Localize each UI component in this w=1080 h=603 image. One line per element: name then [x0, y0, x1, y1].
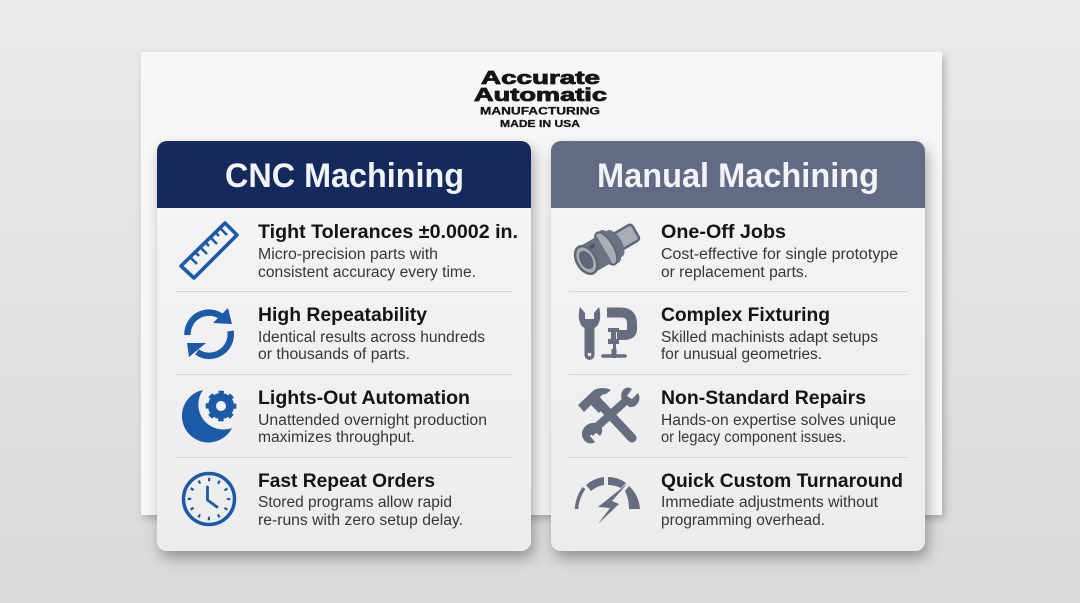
logo: MADE IN USA	[500, 119, 581, 130]
text: lights-out automation: Lights-Out Automation	[258, 387, 470, 409]
text: quick custom turnaround: Immediate adjustments without	[661, 494, 879, 511]
text: high repeatability: Identical results across hundreds	[258, 329, 485, 346]
backing sheet	[141, 52, 942, 515]
text: tight tolerances: consistent accuracy every time.	[258, 264, 476, 281]
text: complex fixturing: for unusual geometries.	[661, 346, 822, 363]
panel: Manual Machining	[551, 141, 925, 551]
text: tight tolerances: Tight Tolerances ±0.0002 in.	[258, 221, 518, 243]
text: lights-out automation: maximizes throughput.	[258, 429, 415, 446]
text: non-standard repairs: Non-Standard Repairs	[661, 387, 866, 409]
text: fast repeat orders	[258, 470, 463, 529]
icon: machined part	[569, 215, 645, 281]
icon: speed gauge	[576, 477, 640, 524]
icon: clock	[184, 474, 234, 524]
heading: Manual Machining: Manual Machining	[597, 157, 879, 195]
icon: moon and gear	[182, 388, 238, 442]
text: complex fixturing: Skilled machinists adapt setups	[661, 329, 878, 346]
text: lights-out automation	[258, 387, 487, 446]
text: one-off jobs: or replacement parts.	[661, 264, 808, 281]
text: fast repeat orders: re-runs with zero setup delay.	[258, 512, 463, 529]
heading: CNC Machining	[157, 141, 531, 208]
text: non-standard repairs: or legacy component issues.	[661, 429, 846, 446]
logo: Automatic	[474, 85, 607, 105]
text: tight tolerances	[258, 221, 518, 281]
icon: ruler	[181, 223, 237, 278]
text: one-off jobs: Cost-effective for single prototype	[661, 246, 898, 263]
heading: CNC Machining: CNC Machining	[225, 157, 464, 195]
text: quick custom turnaround: Quick Custom Turnaround	[661, 470, 903, 492]
text: complex fixturing: Complex Fixturing	[661, 304, 830, 326]
text: fast repeat orders: Fast Repeat Orders	[258, 470, 435, 492]
icon: hammer and wrench	[578, 388, 639, 443]
heading: Manual Machining	[551, 141, 925, 208]
panel: CNC Machining	[157, 141, 531, 551]
text: non-standard repairs: Hands-on expertise solves unique	[661, 412, 896, 429]
logo: Accurate	[481, 68, 600, 88]
icon: repeat arrows	[187, 308, 232, 357]
text: lights-out automation: Unattended overnight production	[258, 412, 487, 429]
logo	[474, 68, 607, 130]
text: high repeatability: or thousands of parts.	[258, 346, 410, 363]
text: non-standard repairs	[661, 387, 896, 446]
logo: MANUFACTURING	[480, 106, 600, 118]
text: high repeatability: High Repeatability	[258, 304, 427, 326]
text: high repeatability	[258, 304, 485, 363]
text: one-off jobs: One-Off Jobs	[661, 221, 786, 243]
text: quick custom turnaround: programming overhead.	[661, 512, 825, 529]
text: quick custom turnaround	[661, 470, 903, 529]
text: tight tolerances: Micro-precision parts with	[258, 246, 438, 263]
icon: wrench and clamp	[579, 307, 632, 360]
text: fast repeat orders: Stored programs allow rapid	[258, 494, 452, 511]
text: complex fixturing	[661, 304, 878, 363]
text: one-off jobs	[661, 221, 898, 281]
